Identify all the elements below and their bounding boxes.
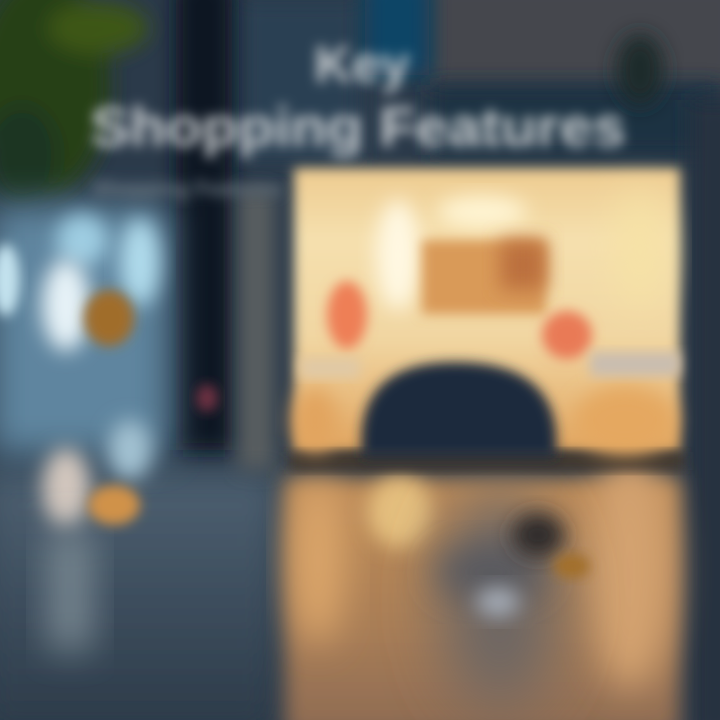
- orange reflection icon: [88, 485, 140, 525]
- coral cushion right: [542, 311, 592, 359]
- title: Shopping Features: [90, 95, 626, 158]
- framed artwork: [422, 240, 546, 314]
- coral cushion left: [327, 281, 367, 349]
- left window panel: [0, 205, 170, 650]
- orange circle icon: [84, 290, 134, 346]
- navy armchair: [361, 362, 557, 458]
- title: Key: [314, 36, 410, 94]
- dark pillar: [176, 0, 232, 450]
- lit room panel: [290, 168, 684, 470]
- pink accent on pillar: [196, 384, 218, 412]
- green plant: [0, 0, 148, 205]
- blue ceiling accent: [365, 0, 429, 75]
- floor reflection of room: [285, 450, 680, 720]
- grey post: [238, 190, 274, 470]
- dark accent upper right: [616, 34, 664, 106]
- subtitle: Shopping Features: [92, 176, 282, 201]
- title: [90, 36, 626, 158]
